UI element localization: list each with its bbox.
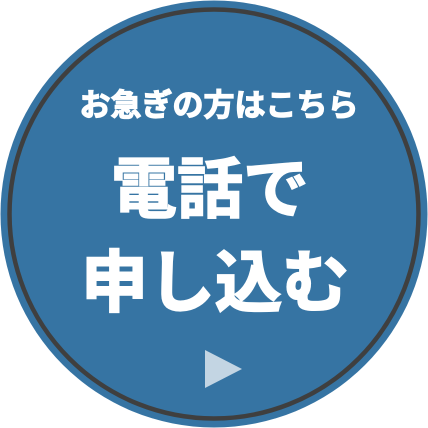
subheading: お急ぎの方はこちら [80, 88, 358, 123]
main heading line 1: 電話で [111, 152, 309, 226]
main heading line 2: 申し込む [81, 246, 349, 321]
icon: play arrow [205, 350, 242, 388]
